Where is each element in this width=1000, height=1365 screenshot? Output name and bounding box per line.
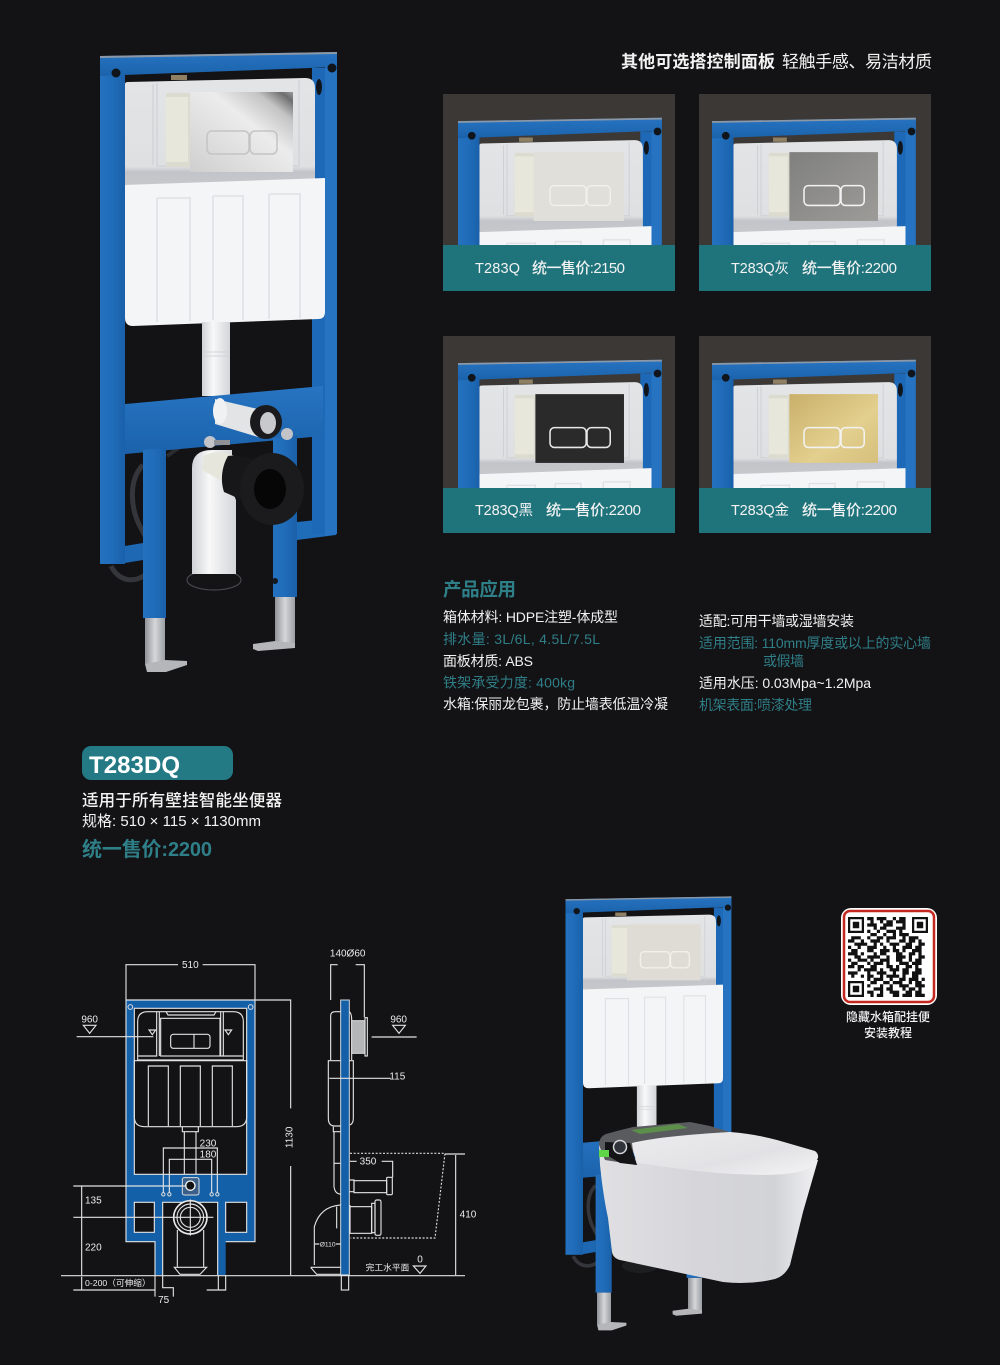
spec list left: 箱体材料: HDPE注塑-体成型 (443, 609, 618, 625)
front dimensions: 960 (81, 1014, 98, 1025)
spec list left (443, 609, 668, 712)
price: 统一售价:2200 (82, 837, 212, 861)
side view (311, 948, 477, 1290)
water inlet pipe (213, 398, 282, 439)
side view: 115 (389, 1071, 406, 1082)
front dimensions: 230 (200, 1138, 217, 1149)
side view: 350 (360, 1156, 377, 1167)
side view: 410 (460, 1210, 477, 1221)
front dimensions: 1130 (284, 1126, 295, 1148)
price band: T283Q灰 (731, 260, 789, 277)
QR pattern (848, 917, 928, 997)
spec list right: 机架表面:喷漆处理 (699, 697, 812, 713)
main product: in-wall cistern frame (100, 52, 337, 672)
front dimensions: 0-200（可伸缩） (85, 1277, 151, 1288)
front dimensions (61, 960, 465, 1306)
price band: 统一售价:2200 (802, 501, 897, 519)
product description (82, 791, 282, 830)
section heading: other panels (621, 52, 932, 72)
price band: T283Q黑 (475, 503, 533, 519)
spec list right (699, 613, 931, 713)
price band (443, 488, 675, 533)
spec list right: 适用范围: 110mm厚度或以上的实心墙 (699, 635, 931, 651)
spec list left: 面板材质: ABS (443, 653, 533, 669)
model badge (82, 746, 233, 780)
spec list left: 排水量: 3L/6L, 4.5L/7.5L (443, 631, 600, 647)
front view (126, 1000, 255, 1297)
installed product with smart toilet (566, 896, 818, 1330)
price band (699, 488, 931, 533)
side view: 完工水平面 (366, 1262, 410, 1273)
price band: 统一售价:2150 (532, 259, 625, 277)
toilet lid (632, 1132, 818, 1175)
side view: Ø110 (320, 1241, 336, 1248)
front dimensions: 960 (390, 1014, 407, 1025)
spec list right: 或假墙 (763, 653, 804, 669)
side view: 140Ø60 (330, 948, 366, 959)
section heading: other panels: 其他可选搭控制面板 (621, 52, 775, 72)
side view: 0 (417, 1254, 423, 1265)
front dimensions: 510 (182, 960, 199, 971)
price band: T283Q金 (731, 502, 790, 519)
QR caption (846, 1009, 930, 1040)
price band (443, 245, 675, 291)
product description: 适用于所有壁挂智能坐便器 (82, 791, 282, 810)
price band: 统一售价:2200 (802, 259, 897, 277)
heading: product application: 产品应用 (443, 579, 516, 600)
spec list right: 适用水压: 0.03Mpa~1.2Mpa (699, 675, 871, 691)
section heading: other panels: 轻触手感、易洁材质 (782, 52, 932, 72)
spec list left: 铁架承受力度: 400kg (443, 674, 575, 690)
spec list left: 水箱:保丽龙包裹，防止墙表低温冷凝 (443, 696, 668, 712)
spec list right: 适配:可用干墙或湿墙安装 (699, 613, 854, 629)
toilet bowl (599, 1145, 818, 1283)
price band: 统一售价:2200 (546, 501, 641, 519)
toilet underside (622, 1259, 658, 1273)
QR caption: 安装教程 (864, 1025, 912, 1040)
QR caption: 隐藏水箱配挂便 (846, 1009, 930, 1024)
control housing (599, 1122, 730, 1165)
front dimensions: 220 (85, 1242, 102, 1253)
panel card: T283Q grey (699, 94, 931, 291)
front dimensions: 180 (200, 1150, 217, 1161)
price band (699, 245, 931, 291)
technical drawing (61, 948, 477, 1306)
flush plate: stainless (190, 92, 293, 172)
panel card: T283Q black (443, 336, 675, 533)
bolts (204, 428, 293, 448)
drain elbow pipe (187, 450, 304, 590)
product description: 规格: 510 × 115 × 1130mm (82, 813, 261, 830)
model badge: T283DQ (89, 752, 180, 779)
front dimensions: 75 (158, 1295, 170, 1306)
front dimensions: 135 (85, 1196, 102, 1207)
price band: T283Q (475, 261, 520, 277)
panel card: T283Q white (443, 94, 675, 291)
panel card: T283Q gold (699, 336, 931, 533)
QR code card (841, 908, 937, 1005)
